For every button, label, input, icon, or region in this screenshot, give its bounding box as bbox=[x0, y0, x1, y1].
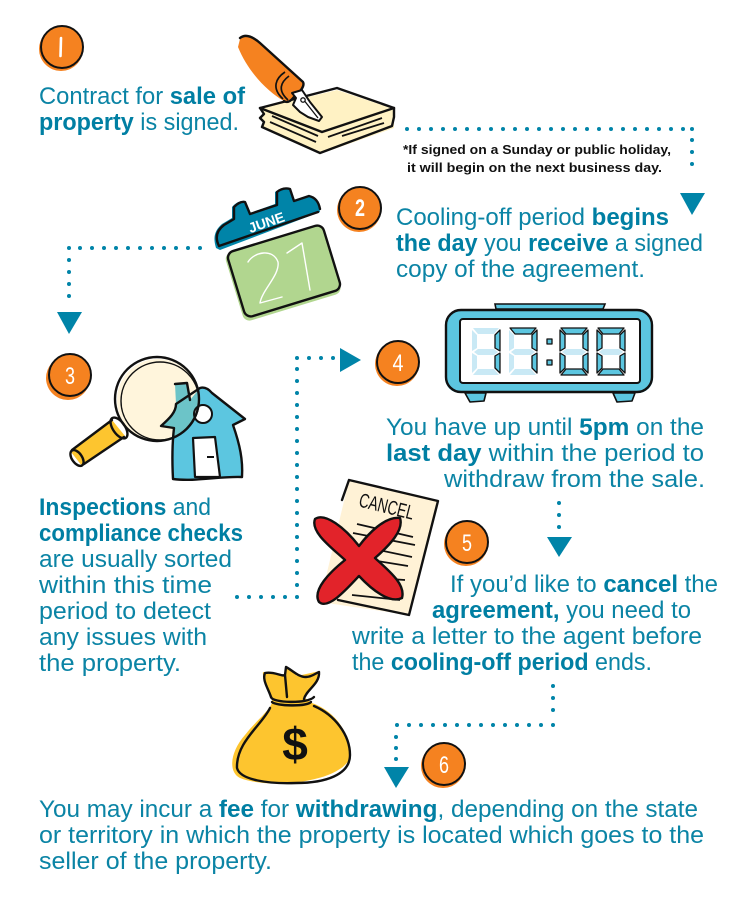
step 5 text bbox=[351, 571, 718, 676]
icon: alarm clock bbox=[445, 304, 653, 402]
clock digit: 0 bbox=[597, 328, 625, 375]
dotted connector 2 to 3 bbox=[67, 246, 202, 298]
icon: calendar: JUNE bbox=[246, 209, 287, 236]
step 6 text: seller of the property. bbox=[39, 848, 272, 875]
step 3 text: within this time bbox=[38, 572, 212, 599]
arrow: down to step 6 bbox=[384, 767, 409, 788]
icon: money bag: $ bbox=[282, 718, 308, 770]
clock digit: 0 bbox=[560, 328, 588, 375]
step 3 badge: 3 bbox=[65, 363, 75, 390]
step 2 text: copy of the agreement. bbox=[396, 256, 645, 283]
dotted connector 4 to 5 bbox=[557, 501, 561, 529]
step 3 text: Inspections and bbox=[39, 494, 211, 521]
step 2 text bbox=[396, 204, 703, 283]
clock digit: unlit 1 bbox=[472, 328, 500, 375]
step 5 text: If you’d like to cancel the bbox=[450, 571, 718, 598]
step 5 text: agreement, you need to bbox=[432, 597, 691, 624]
icon: magnifying glass over house bbox=[68, 357, 245, 480]
icon: calendar bbox=[214, 188, 342, 322]
step 4 text: You have up until 5pm on the bbox=[386, 414, 704, 441]
step 1 text: Contract for sale of bbox=[39, 83, 246, 110]
step 2 text: the day you receive a signed bbox=[396, 230, 703, 257]
dotted connector 5 to 6 bbox=[394, 684, 555, 761]
step 6 badge: 6 bbox=[439, 752, 449, 779]
step 5 text: write a letter to the agent before bbox=[351, 623, 702, 650]
step 4 badge bbox=[375, 341, 419, 386]
step 2 badge: 2 bbox=[355, 195, 365, 222]
arrow: down to step 3 bbox=[57, 312, 82, 334]
step 6 text bbox=[39, 796, 704, 875]
clock colon bbox=[547, 339, 552, 365]
footnote bbox=[403, 142, 671, 175]
footnote: it will begin on the next business day. bbox=[407, 160, 662, 175]
icon: cancel document with red cross bbox=[314, 480, 438, 615]
step 5 badge: 5 bbox=[462, 530, 472, 557]
icon: pen signing document bbox=[238, 36, 394, 154]
step 2 text: Cooling-off period begins bbox=[396, 204, 669, 231]
icon: money bag bbox=[232, 667, 350, 784]
step 5 badge bbox=[444, 521, 488, 566]
step 6 text: or territory in which the property is located which goes to the bbox=[39, 822, 704, 849]
step 3 text: compliance checks bbox=[39, 520, 243, 547]
step 1 text bbox=[39, 83, 246, 136]
step 3 badge bbox=[46, 354, 91, 400]
step 3 text bbox=[38, 494, 243, 677]
icon: cancel document with red cross: CANCEL bbox=[357, 490, 416, 525]
clock digit: 7 bbox=[509, 328, 537, 375]
arrow: down to step 5 bbox=[547, 537, 572, 557]
step 3 text: any issues with bbox=[39, 624, 207, 651]
step 4 text: last day within the period to bbox=[386, 440, 704, 467]
step 3 text: are usually sorted bbox=[39, 546, 232, 573]
step 2 badge bbox=[337, 187, 381, 232]
step 6 badge bbox=[421, 743, 465, 788]
dotted connector 3 to 4 bbox=[235, 356, 335, 599]
step 4 text bbox=[386, 414, 705, 493]
step 5 text: the cooling-off period ends. bbox=[352, 649, 652, 676]
arrow: right to step 4 bbox=[340, 348, 361, 372]
dotted connector 1 to 2 bbox=[405, 127, 694, 166]
step 1 text: property is signed. bbox=[39, 109, 239, 136]
step 3 text: period to detect bbox=[39, 598, 211, 625]
step 4 text: withdraw from the sale. bbox=[443, 466, 705, 493]
step 4 badge: 4 bbox=[392, 350, 404, 377]
step 3 text: the property. bbox=[39, 650, 181, 677]
step 1 badge bbox=[39, 26, 83, 71]
footnote: *If signed on a Sunday or public holiday, bbox=[403, 142, 671, 157]
arrow: down to step 2 bbox=[680, 193, 705, 215]
step 6 text: You may incur a fee for withdrawing, depending on the state bbox=[39, 796, 698, 823]
